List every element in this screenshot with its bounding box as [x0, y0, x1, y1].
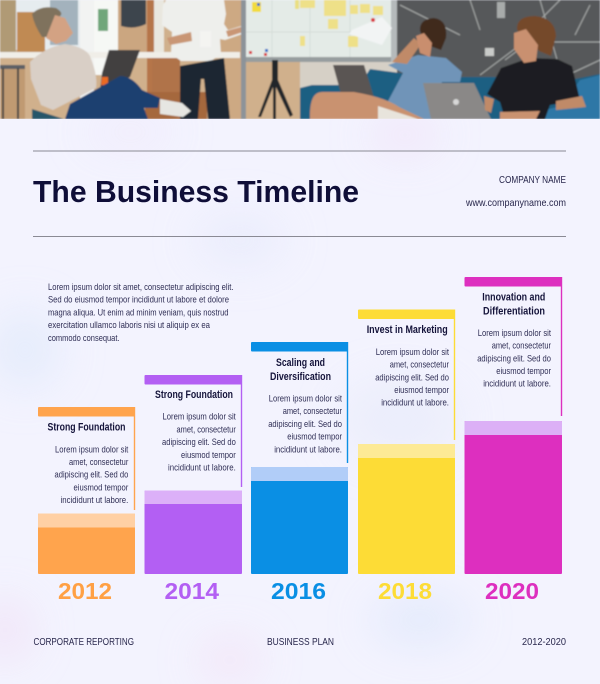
card 2016 heading: [270, 357, 331, 383]
card 2012 text: adipiscing elit. Sed do: [54, 470, 128, 480]
year 2016: 2016: [271, 578, 326, 604]
card 2020 text: Lorem ipsum dolor sit: [478, 328, 551, 338]
title: The Business Timeline: [33, 174, 359, 209]
card 2012 side line: [134, 407, 135, 510]
intro paragraph: magna aliqua. Ut enim ad minim veniam, quis nostrud: [48, 307, 228, 317]
card 2020 text: adipiscing elit. Sed do: [477, 353, 551, 363]
year 2014: 2014: [164, 578, 219, 604]
column 2012: Strong Foundation: [38, 407, 135, 604]
card 2016 heading: Diversification: [270, 371, 331, 383]
card 2020 side line: [561, 277, 562, 416]
legs: [310, 92, 424, 119]
year 2020: 2020: [485, 578, 539, 604]
bar 2018: [358, 444, 455, 574]
card 2016 header bar: [251, 342, 348, 352]
card 2020 text: incididunt ut labore.: [483, 379, 551, 389]
card 2014 side line: [241, 375, 242, 487]
card 2014 header bar: [144, 375, 242, 384]
card 2014 text: adipiscing elit. Sed do: [162, 437, 236, 447]
card 2020 text: eiusmod tempor: [496, 366, 551, 376]
year 2018: 2018: [378, 578, 432, 604]
card 2020 text: [477, 328, 551, 389]
card 2016 text: eiusmod tempor: [287, 432, 342, 442]
whiteboard and stand: [241, 0, 246, 119]
man in blue shirt: [387, 55, 462, 119]
man in black t-shirt: [487, 58, 580, 119]
card 2014 text: amet, consectetur: [176, 424, 236, 434]
card 2014 heading: Strong Foundation: [155, 389, 233, 401]
dark wall: [397, 0, 600, 84]
card 2012 header bar: [38, 407, 135, 416]
laptop right: [423, 83, 491, 119]
card 2012 heading: Strong Foundation: [48, 422, 126, 434]
card 2012 text: [54, 444, 129, 505]
card 2014 text: Lorem ipsum dolor sit: [162, 412, 236, 422]
card 2012 text: eiusmod tempor: [74, 482, 128, 492]
card 2018 text: adipiscing elit. Sed do: [375, 372, 449, 382]
bar 2012: [38, 514, 135, 574]
company name: COMPANY NAME: [499, 175, 566, 186]
intro paragraph: [48, 282, 234, 343]
bar 2020: [464, 421, 562, 574]
intro paragraph: Lorem ipsum dolor sit amet, consectetur adipiscing elit.: [48, 282, 234, 292]
card 2016 text: amet, consectetur: [283, 406, 342, 416]
header rule bottom: [33, 236, 566, 237]
photo: team meeting around a whiteboard: [0, 0, 600, 119]
column 2014: Strong Foundation: [144, 375, 242, 604]
footer: business plan: BUSINESS PLAN: [267, 637, 334, 648]
card 2016 text: incididunt ut labore.: [274, 444, 342, 454]
card 2014 text: incididunt ut labore.: [168, 462, 236, 472]
card 2018 heading: Invest in Marketing: [367, 324, 448, 336]
card 2018 text: eiusmod tempor: [394, 385, 449, 395]
company website: www.companyname.com: [465, 198, 566, 209]
laptop left: [332, 64, 374, 96]
intro paragraph: commodo consequat.: [48, 333, 120, 343]
card 2012 text: amet, consectetur: [69, 457, 128, 467]
card 2014 text: [162, 412, 236, 472]
card 2020 heading: [482, 292, 545, 317]
column 2018: Invest in Marketing: [358, 310, 455, 604]
card 2018 text: Lorem ipsum dolor sit: [376, 347, 449, 357]
bar 2016: [251, 467, 348, 574]
card 2016 heading: Scaling and: [276, 357, 325, 369]
bar 2014: [144, 490, 242, 574]
card 2016 side line: [347, 342, 348, 463]
intro paragraph: Sed do eiusmod tempor incididunt ut labore et dolore: [48, 295, 229, 305]
card 2018 side line: [454, 310, 455, 440]
footer: date range: 2012-2020: [522, 637, 566, 648]
card 2018 header bar: [358, 310, 455, 319]
card 2012 text: incididunt ut labore.: [60, 495, 128, 505]
card 2016 text: adipiscing elit. Sed do: [268, 419, 342, 429]
column 2016: Scaling and Diversification: [251, 342, 348, 604]
header rule top: [33, 150, 566, 152]
footer: corporate reporting: CORPORATE REPORTING: [34, 637, 134, 648]
sofa: [300, 69, 600, 119]
card 2020 heading: Differentiation: [483, 305, 545, 317]
card 2012 text: Lorem ipsum dolor sit: [55, 444, 129, 454]
card 2014 text: eiusmod tempor: [181, 450, 236, 460]
card 2016 text: [268, 394, 342, 454]
card 2020 heading: Innovation and: [482, 292, 545, 304]
year 2012: 2012: [58, 578, 112, 604]
column 2020: Innovation and Differentiation: [464, 277, 562, 604]
card 2016 text: Lorem ipsum dolor sit: [269, 394, 342, 404]
card 2020 header bar: [464, 277, 562, 286]
card 2018 text: amet, consectetur: [390, 360, 449, 370]
seated man: [30, 44, 96, 110]
card 2020 text: amet, consectetur: [492, 341, 551, 351]
card 2018 text: incididunt ut labore.: [381, 398, 449, 408]
intro paragraph: exercitation ullamco laboris nisi ut aliquip ex ea: [48, 320, 211, 330]
presenter: [162, 0, 251, 61]
card 2018 text: [375, 347, 449, 408]
